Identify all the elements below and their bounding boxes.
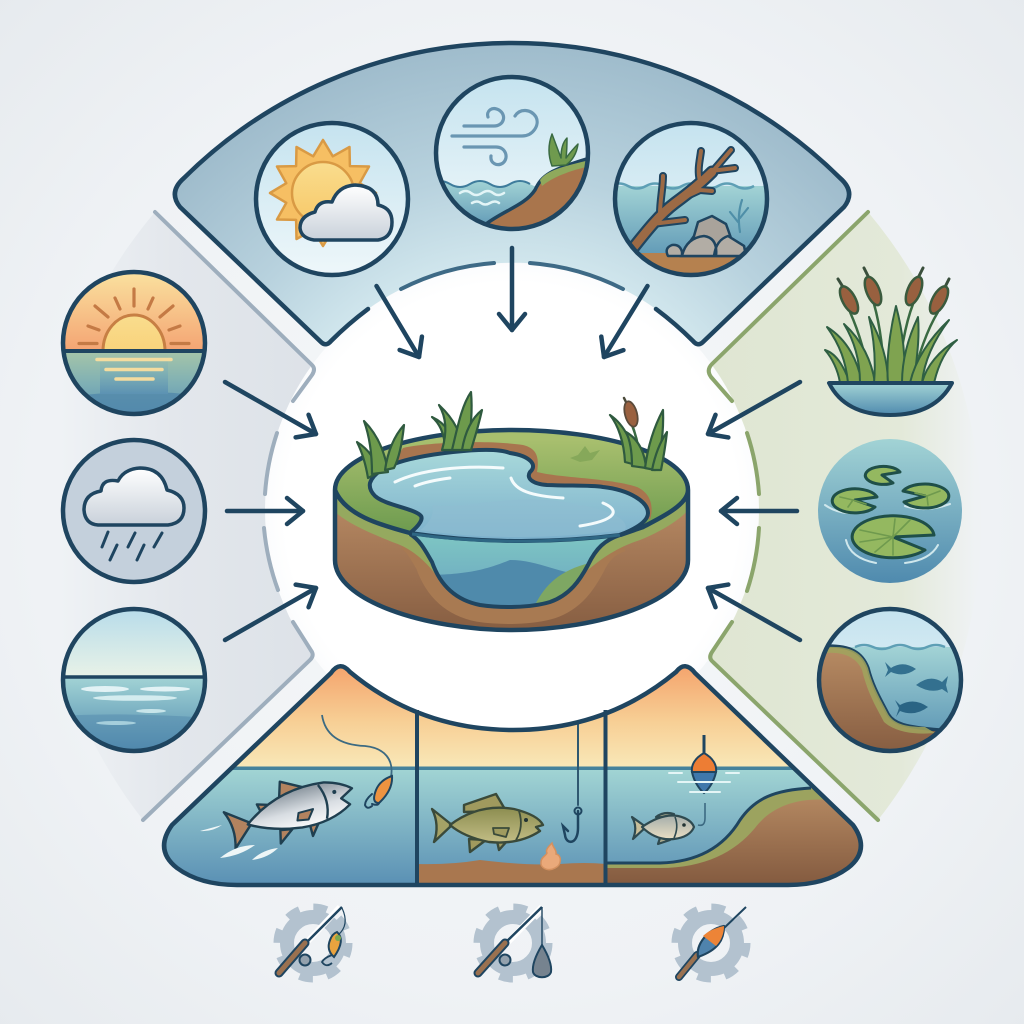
arrow: left lower into pond <box>225 588 316 640</box>
grass middle <box>432 392 482 450</box>
arrow: left middle into pond <box>227 509 303 513</box>
icon: gear with rod and sinker <box>478 907 551 978</box>
icon: wind over shoreline <box>430 77 590 240</box>
icon: calm water horizon <box>60 605 210 752</box>
icon: sunrise over water <box>60 270 210 416</box>
water surface <box>370 450 648 541</box>
arrow: right lower into pond <box>708 588 800 640</box>
bank right section <box>606 788 880 886</box>
icon: lily pads <box>818 439 962 583</box>
arrow: right middle into pond <box>721 509 797 513</box>
arrow: top left into pond <box>376 286 419 357</box>
bait <box>541 843 560 870</box>
icon: shoreline with fish <box>815 609 965 760</box>
arrow: left upper into pond <box>225 382 316 434</box>
float <box>669 735 739 825</box>
icon: cattails in bowl <box>825 268 957 415</box>
arrow: top centre into pond <box>510 248 514 330</box>
cattail and grass right <box>610 398 667 470</box>
panel: left sky conditions background <box>41 212 314 820</box>
right panel outline <box>709 212 878 820</box>
fish 2 bass <box>432 794 543 852</box>
lure and line <box>322 715 392 808</box>
arrow: top right into pond <box>604 286 648 357</box>
hook <box>563 722 582 842</box>
water cut-away <box>416 536 608 605</box>
fish 3 small <box>632 813 694 844</box>
arrow: right upper into pond <box>708 382 800 434</box>
fish 1 salmon <box>220 764 361 857</box>
icon: gear with float <box>676 907 746 978</box>
icon: sun and cloud <box>256 123 408 275</box>
sediment middle section <box>419 860 604 883</box>
icon: rain cloud <box>63 440 205 582</box>
panel: bottom fishing methods <box>150 655 880 888</box>
icon: submerged branch and rocks <box>610 123 775 278</box>
panel: top factors <box>175 43 849 344</box>
icon: gear with rod and lure <box>278 907 348 978</box>
panel: right habitat background <box>709 212 981 820</box>
central pond cross-section <box>335 392 688 630</box>
left panel outline <box>143 212 314 820</box>
grass left <box>357 421 404 478</box>
central white circle <box>265 263 759 757</box>
